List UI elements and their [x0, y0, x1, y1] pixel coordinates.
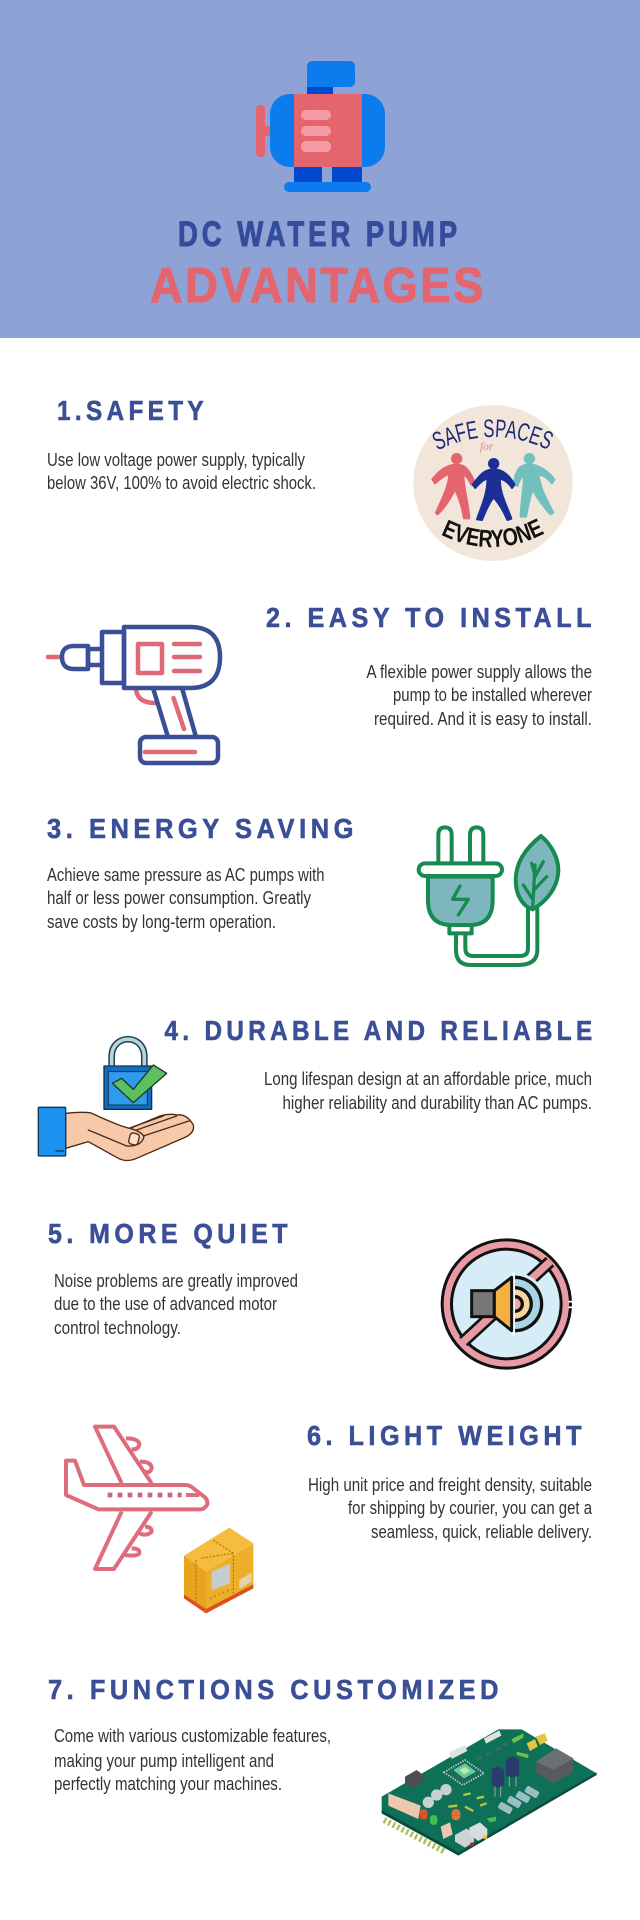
heading: energy saving: 3. ENERGY SAVING	[47, 813, 358, 844]
icon: water pump	[256, 61, 385, 192]
heading: functions customized: 7. FUNCTIONS CUSTOMIZED	[48, 1674, 503, 1705]
section 1: safety	[47, 395, 573, 561]
icon: hand holding padlock	[38, 1039, 194, 1160]
icon: circuit board	[382, 1729, 597, 1856]
text: functions description	[54, 1726, 331, 1794]
text: light weight description: for shipping by courier, you can get a	[348, 1498, 593, 1518]
figure: navy person	[473, 469, 515, 520]
section 3: energy saving	[47, 813, 558, 965]
icon: cardboard box	[184, 1528, 253, 1613]
section 6: light weight	[66, 1420, 593, 1613]
icon: safe spaces badge	[413, 405, 573, 561]
icon: safe spaces badge: EVERYONE	[442, 518, 544, 548]
title: advantages: ADVANTAGES	[150, 259, 486, 313]
text: install description: A flexible power supply allows the	[366, 662, 592, 682]
section 5: more quiet	[48, 1218, 574, 1370]
title: DC water pump: DC WATER PUMP	[178, 215, 461, 254]
heading: more quiet: 5. MORE QUIET	[48, 1218, 292, 1249]
text: install description	[366, 662, 592, 729]
icon: safe spaces badge: for	[480, 441, 494, 453]
text: safety description	[47, 450, 316, 493]
icon: safe spaces badge: SAFE SPACES	[432, 419, 553, 449]
text: durable description	[264, 1069, 592, 1113]
text: functions description: perfectly matching your machines.	[54, 1774, 282, 1794]
figure: red person	[432, 465, 474, 518]
text: energy description: save costs by long-term operation.	[47, 912, 276, 932]
section 7: functions customized	[48, 1674, 597, 1856]
figure: teal person	[514, 465, 554, 517]
text: quiet description: due to the use of advanced motor	[54, 1294, 277, 1314]
text: light weight description: High unit price and freight density, suitable	[308, 1475, 592, 1495]
icon: cordless drill	[48, 627, 220, 763]
text: functions description: Come with various customizable features,	[54, 1726, 331, 1746]
header panel	[0, 0, 640, 338]
text: light weight description: seamless, quick, reliable delivery.	[371, 1522, 592, 1542]
text: energy description: Achieve same pressure as AC pumps with	[47, 865, 324, 885]
text: safety description: below 36V, 100% to avoid electric shock.	[47, 473, 316, 493]
icon: plug and leaf	[419, 827, 558, 965]
text: light weight description	[308, 1475, 593, 1542]
heading: safety: 1.SAFETY	[57, 395, 208, 426]
text: energy description	[47, 865, 324, 932]
section 4: durable and reliable	[38, 1015, 596, 1160]
text: safety description: Use low voltage power supply, typically	[47, 450, 305, 470]
icon: no sound	[441, 1238, 574, 1370]
text: install description: pump to be installed wherever	[393, 685, 592, 705]
text: install description: required. And it is easy to install.	[374, 709, 592, 729]
text: quiet description: control technology.	[54, 1318, 181, 1338]
text: functions description: making your pump intelligent and	[54, 1751, 274, 1771]
text: quiet description: Noise problems are greatly improved	[54, 1271, 298, 1291]
heading: light weight: 6. LIGHT WEIGHT	[307, 1420, 586, 1451]
text: quiet description	[54, 1271, 298, 1338]
icon: airplane	[66, 1427, 207, 1569]
text: energy description: half or less power consumption. Greatly	[47, 888, 311, 908]
section 2: easy to install	[48, 602, 596, 763]
heading: easy to install: 2. EASY TO INSTALL	[266, 602, 596, 633]
